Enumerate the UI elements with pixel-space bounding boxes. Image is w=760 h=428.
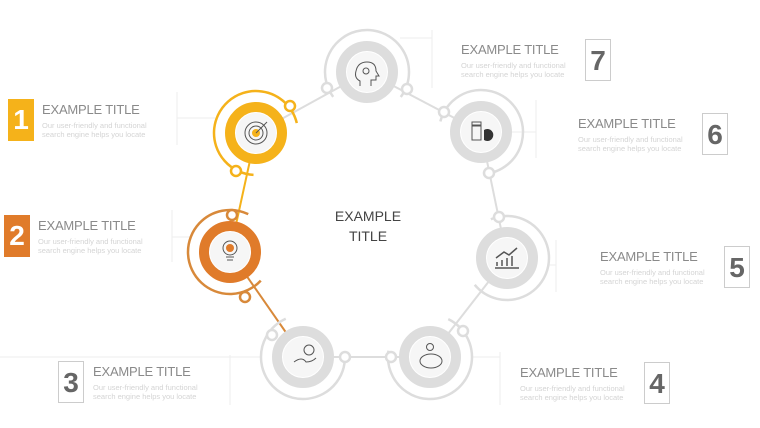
item 5: Our user-friendly and functional [600, 268, 705, 277]
item 1 [8, 99, 147, 141]
item 2: EXAMPLE TITLE [38, 218, 136, 233]
item 7: EXAMPLE TITLE [461, 42, 559, 57]
item 3 [58, 361, 198, 403]
item 1: Our user-friendly and functional [42, 121, 147, 130]
item 2: 2 [9, 220, 25, 251]
item 1: EXAMPLE TITLE [42, 102, 140, 117]
item 5: EXAMPLE TITLE [600, 249, 698, 264]
item 4: Our user-friendly and functional [520, 384, 625, 393]
node 2 [204, 226, 256, 278]
node 5 [481, 232, 533, 284]
item 6: search engine helps you locate [578, 144, 681, 153]
item 2 [4, 215, 143, 257]
node 4 [404, 331, 456, 383]
item 3: 3 [63, 367, 79, 398]
node 6 [455, 106, 507, 158]
item 3: search engine helps you locate [93, 392, 196, 401]
outer arcs [171, 13, 562, 413]
item 5: search engine helps you locate [600, 277, 703, 286]
center title: EXAMPLE [335, 208, 401, 224]
item 6: EXAMPLE TITLE [578, 116, 676, 131]
item 7 [461, 39, 611, 81]
item 4: search engine helps you locate [520, 393, 623, 402]
item 2: search engine helps you locate [38, 246, 141, 255]
connector lines [230, 72, 507, 357]
node 1 [230, 107, 282, 159]
item 4 [520, 362, 670, 404]
item 3: Our user-friendly and functional [93, 383, 198, 392]
node 7 [341, 46, 393, 98]
item 5: 5 [729, 252, 745, 283]
item 7: search engine helps you locate [461, 70, 564, 79]
item 6 [578, 113, 728, 155]
connector dots [227, 83, 504, 362]
node 3 [277, 331, 329, 383]
item 4: 4 [649, 368, 665, 399]
item 1: search engine helps you locate [42, 130, 145, 139]
item 4: EXAMPLE TITLE [520, 365, 618, 380]
center title: TITLE [349, 228, 387, 244]
item 2: Our user-friendly and functional [38, 237, 143, 246]
item 7: 7 [590, 45, 606, 76]
item 5 [600, 246, 750, 288]
item 6: 6 [707, 119, 723, 150]
item 3: EXAMPLE TITLE [93, 364, 191, 379]
item 7: Our user-friendly and functional [461, 61, 566, 70]
item 6: Our user-friendly and functional [578, 135, 683, 144]
item 1: 1 [13, 104, 29, 135]
center title [335, 208, 401, 244]
